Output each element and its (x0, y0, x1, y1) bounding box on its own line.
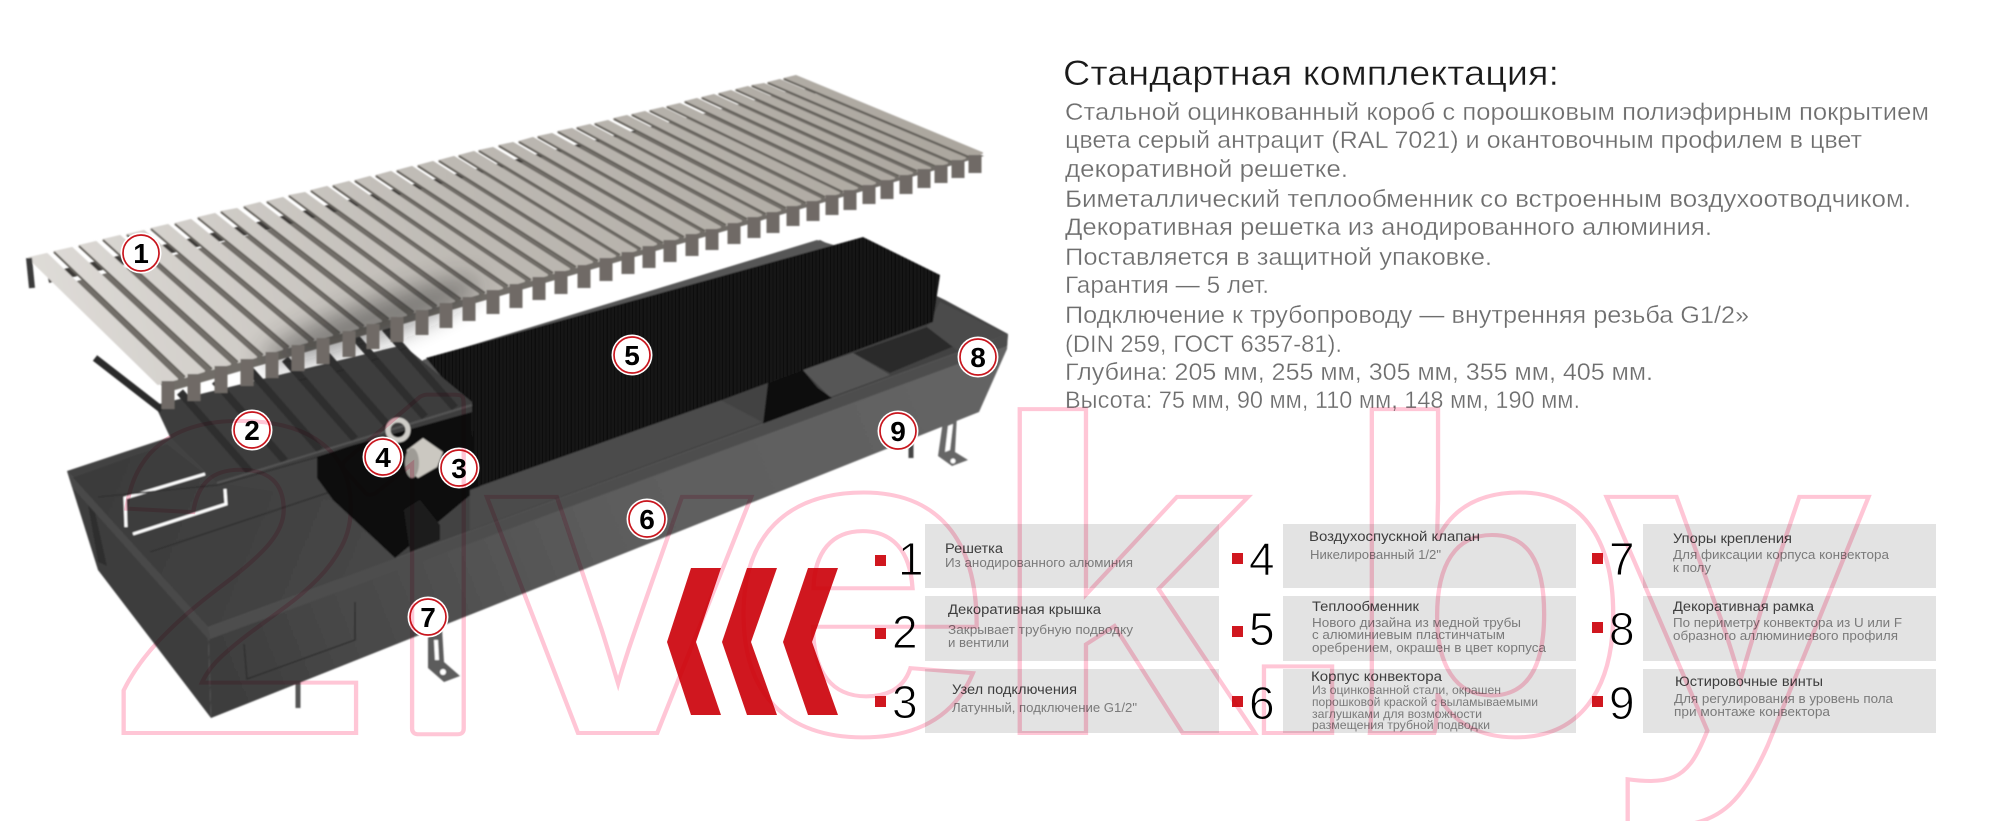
back wall strip (423, 240, 850, 385)
item 1: Из анодированного алюминия (945, 556, 1133, 570)
item 2: Закрывает трубную подводку (948, 623, 1134, 637)
item 1 (875, 524, 1219, 588)
red chevrons (667, 568, 838, 715)
grille crossbar (48, 92, 815, 278)
badge 3: 3 (451, 453, 467, 484)
item 1: 1 (898, 533, 924, 585)
badge 1: 1 (133, 238, 149, 269)
specification text block: Гарантия — 5 лет. (1065, 272, 1269, 299)
front wall rim (208, 334, 1008, 639)
item 8: По периметру конвектора из U или F (1673, 616, 1902, 630)
heading: Стандартная комплектация: (1063, 54, 1559, 93)
badge 5: 5 (624, 340, 640, 371)
item 7: Упоры крепления (1673, 531, 1792, 546)
pipe compartment black (317, 405, 480, 558)
inner ledge (98, 445, 360, 552)
specification text block: (DIN 259, ГОСТ 6357-81). (1065, 331, 1342, 358)
product illustration: convector exploded view (29, 76, 1008, 718)
wall knockout outline (244, 602, 355, 679)
black fitting (763, 370, 832, 424)
grille left end cap (29, 258, 32, 288)
item 4 (1232, 524, 1576, 588)
specification text block: Высота: 75 мм, 90 мм, 110 мм, 148 мм, 190 мм. (1065, 387, 1580, 414)
item 7 (1592, 524, 1936, 588)
item 5: 5 (1249, 603, 1275, 655)
specification text block: цвета серый антрацит (RAL 7021) и окантовочным профилем в цвет (1065, 127, 1862, 154)
item 1: Решетка (945, 541, 1004, 556)
specification text block: декоративной решетке. (1065, 156, 1348, 183)
specification text block: Декоративная решетка из анодированного алюминия. (1065, 214, 1712, 241)
item 6: размещения трубной подводки (1312, 718, 1490, 732)
item 3: Узел подключения (952, 682, 1077, 697)
badge 4: 4 (375, 442, 391, 473)
right end rim (927, 302, 1008, 350)
badge 5 (612, 334, 652, 376)
item 9 (1592, 669, 1936, 733)
badge 6 (626, 498, 668, 540)
item 4: Никелированный 1/2" (1310, 548, 1441, 562)
item 5: с алюминиевым пластинчатым (1312, 628, 1505, 642)
heat exchanger fins (426, 237, 940, 487)
connection node: valve (388, 420, 443, 478)
left hanging screw (296, 680, 300, 708)
item 2: Декоративная крышка (948, 602, 1102, 617)
badge 1 (120, 232, 162, 274)
watermark outline: 1 (281, 358, 573, 800)
item 3: Латунный, подключение G1/2" (952, 701, 1137, 715)
specification text block (1065, 99, 1929, 414)
item 8: Декоративная рамка (1673, 599, 1815, 614)
lower grey insert (470, 400, 762, 530)
watermark outline: vek.by (485, 328, 1874, 821)
item 6: Из оцинкованной стали, окрашен (1312, 683, 1501, 697)
item 4: Воздухоспускной клапан (1309, 529, 1480, 544)
floor right dark (853, 327, 957, 373)
badge 9: 9 (890, 416, 906, 447)
badge 7 (408, 596, 448, 638)
left mounting bracket (428, 628, 460, 682)
item 8 (1592, 596, 1936, 661)
item 9: при монтаже конвектора (1674, 705, 1830, 719)
item 6: Корпус конвектора (1311, 669, 1443, 684)
item 9: 9 (1609, 677, 1635, 729)
end face recess (88, 505, 107, 566)
item 7: к полу (1673, 561, 1712, 575)
badge 3 (438, 448, 480, 488)
item 2 (875, 596, 1219, 661)
item 9: Для регулирования в уровень пола (1674, 692, 1893, 706)
item 6: порошковой краской с выламываемыми (1312, 695, 1538, 709)
grille slat shadow lines (54, 79, 969, 377)
item 3: 3 (892, 676, 918, 728)
left rim (67, 471, 210, 641)
item 5 (1232, 596, 1576, 661)
lid side rail (95, 358, 162, 410)
item 4: 4 (1249, 533, 1275, 585)
specification text block: Глубина: 205 мм, 255 мм, 305 мм, 355 мм, 405 мм. (1065, 359, 1653, 386)
legend column 1 (875, 524, 1219, 733)
badge 6: 6 (639, 504, 655, 535)
housing front wall (208, 334, 1008, 718)
badge 9 (878, 410, 918, 452)
badge 8: 8 (970, 342, 986, 373)
item 7: 7 (1609, 533, 1635, 585)
item 2: и вентили (948, 636, 1009, 650)
housing floor (72, 444, 397, 627)
item 9: Юстировочные винты (1675, 674, 1823, 689)
housing left end face (67, 471, 211, 718)
grille base (62, 88, 984, 392)
item 5: Нового дизайна из медной трубы (1312, 616, 1521, 630)
item 3 (875, 669, 1219, 733)
grille slats (29, 76, 982, 384)
housing back wall (67, 240, 1008, 627)
legend column 2 (1232, 524, 1576, 733)
bracket in compartment (404, 500, 440, 552)
item 5: Теплообменник (1312, 599, 1419, 614)
specification text block: Поставляется в защитной упаковке. (1065, 244, 1492, 271)
badge 4 (362, 436, 404, 478)
grille dark reflection (255, 264, 485, 380)
item 7: Для фиксации корпуса конвектора (1673, 548, 1889, 562)
watermark outline: 2 (107, 328, 375, 821)
decorative lid (155, 328, 472, 483)
item 5: оребрением, окрашен в цвет корпуса (1312, 641, 1546, 655)
specification text block: Биметаллический теплообменник со встроенным воздухоотводчиком. (1065, 186, 1911, 213)
item 6 (1232, 669, 1576, 733)
item 6: 6 (1249, 677, 1275, 729)
item 8: 8 (1609, 603, 1635, 655)
legend column 3 (1592, 524, 1936, 733)
badge 7: 7 (420, 602, 436, 633)
right mounting bracket (938, 396, 968, 466)
knockout slot outline (125, 474, 226, 534)
grille front ends (168, 155, 975, 409)
item 2: 2 (892, 606, 918, 658)
item 8: образного аллюминиевого профиля (1673, 629, 1898, 643)
floor grey plate (803, 353, 890, 397)
badge 2 (232, 410, 272, 450)
specification text block: Стальной оцинкованный короб с порошковым полиэфирным покрытием (1065, 99, 1929, 126)
badge 2: 2 (244, 415, 260, 446)
item 6: заглушками для возможности (1312, 707, 1482, 721)
badge 8 (958, 336, 998, 378)
right adjustment screw (908, 440, 914, 458)
specification text block: Подключение к трубопроводу — внутренняя резьба G1/2» (1065, 302, 1749, 329)
